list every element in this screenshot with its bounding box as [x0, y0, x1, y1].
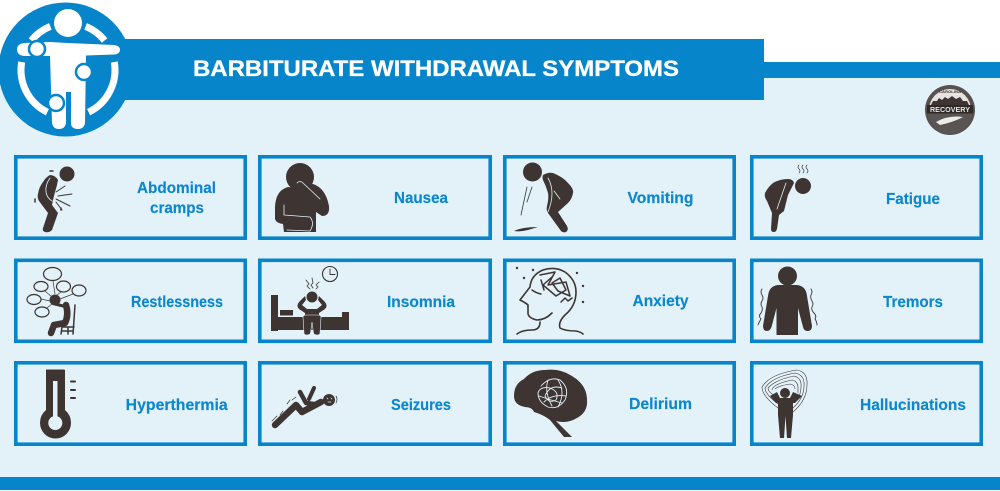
icon: recovery logo: RECOVERY [930, 105, 970, 114]
panel: nausea [260, 157, 490, 238]
panel: hallucinations [752, 363, 981, 444]
label: Restlessness [131, 294, 223, 311]
panel: vomiting [505, 157, 734, 238]
label: Insomnia [387, 294, 455, 311]
icon: thermometer [40, 370, 75, 438]
icon: tremors [758, 266, 817, 335]
icon: seizures [272, 388, 337, 425]
header thin bar [764, 62, 1000, 78]
label: Fatigue [886, 191, 940, 208]
label: Seizures [391, 397, 451, 414]
icon: recovery logo: CAROLINA [939, 89, 961, 94]
panel: hyperthermia [16, 363, 245, 444]
icon: insomnia [271, 266, 349, 335]
panel: fatigue [752, 157, 981, 238]
panel: abdominal cramps: cramps [150, 200, 204, 217]
icon: restlessness [27, 268, 86, 334]
label: Abdominal [137, 180, 216, 197]
panel: tremors [752, 260, 981, 341]
label: Hallucinations [860, 397, 966, 414]
label: Tremors [883, 294, 943, 311]
icon: vomiting [514, 162, 573, 232]
footer bar [0, 477, 1000, 490]
label: Anxiety [632, 293, 689, 310]
icon: fatigue [765, 165, 811, 232]
panel: anxiety [505, 260, 734, 341]
label: Vomiting [628, 190, 694, 207]
panel: delirium [505, 363, 734, 444]
panel: abdominal cramps [16, 157, 245, 238]
title banner [100, 39, 764, 100]
panel: insomnia [260, 260, 490, 341]
icon: hallucinations [762, 370, 807, 438]
icon: recovery logo [925, 85, 975, 135]
label: Delirium [629, 396, 692, 413]
icon: nausea [275, 163, 329, 232]
icon: anxiety [516, 267, 584, 334]
panel: seizures [260, 363, 490, 444]
label: Hyperthermia [126, 397, 228, 414]
panel: restlessness [16, 260, 245, 341]
icon: body pain emblem [0, 2, 132, 136]
label: Nausea [394, 190, 448, 207]
icon: brain [514, 370, 587, 437]
icon: abdominal cramps [35, 166, 74, 232]
title: BARBITURATE WITHDRAWAL SYMPTOMS [193, 56, 679, 81]
